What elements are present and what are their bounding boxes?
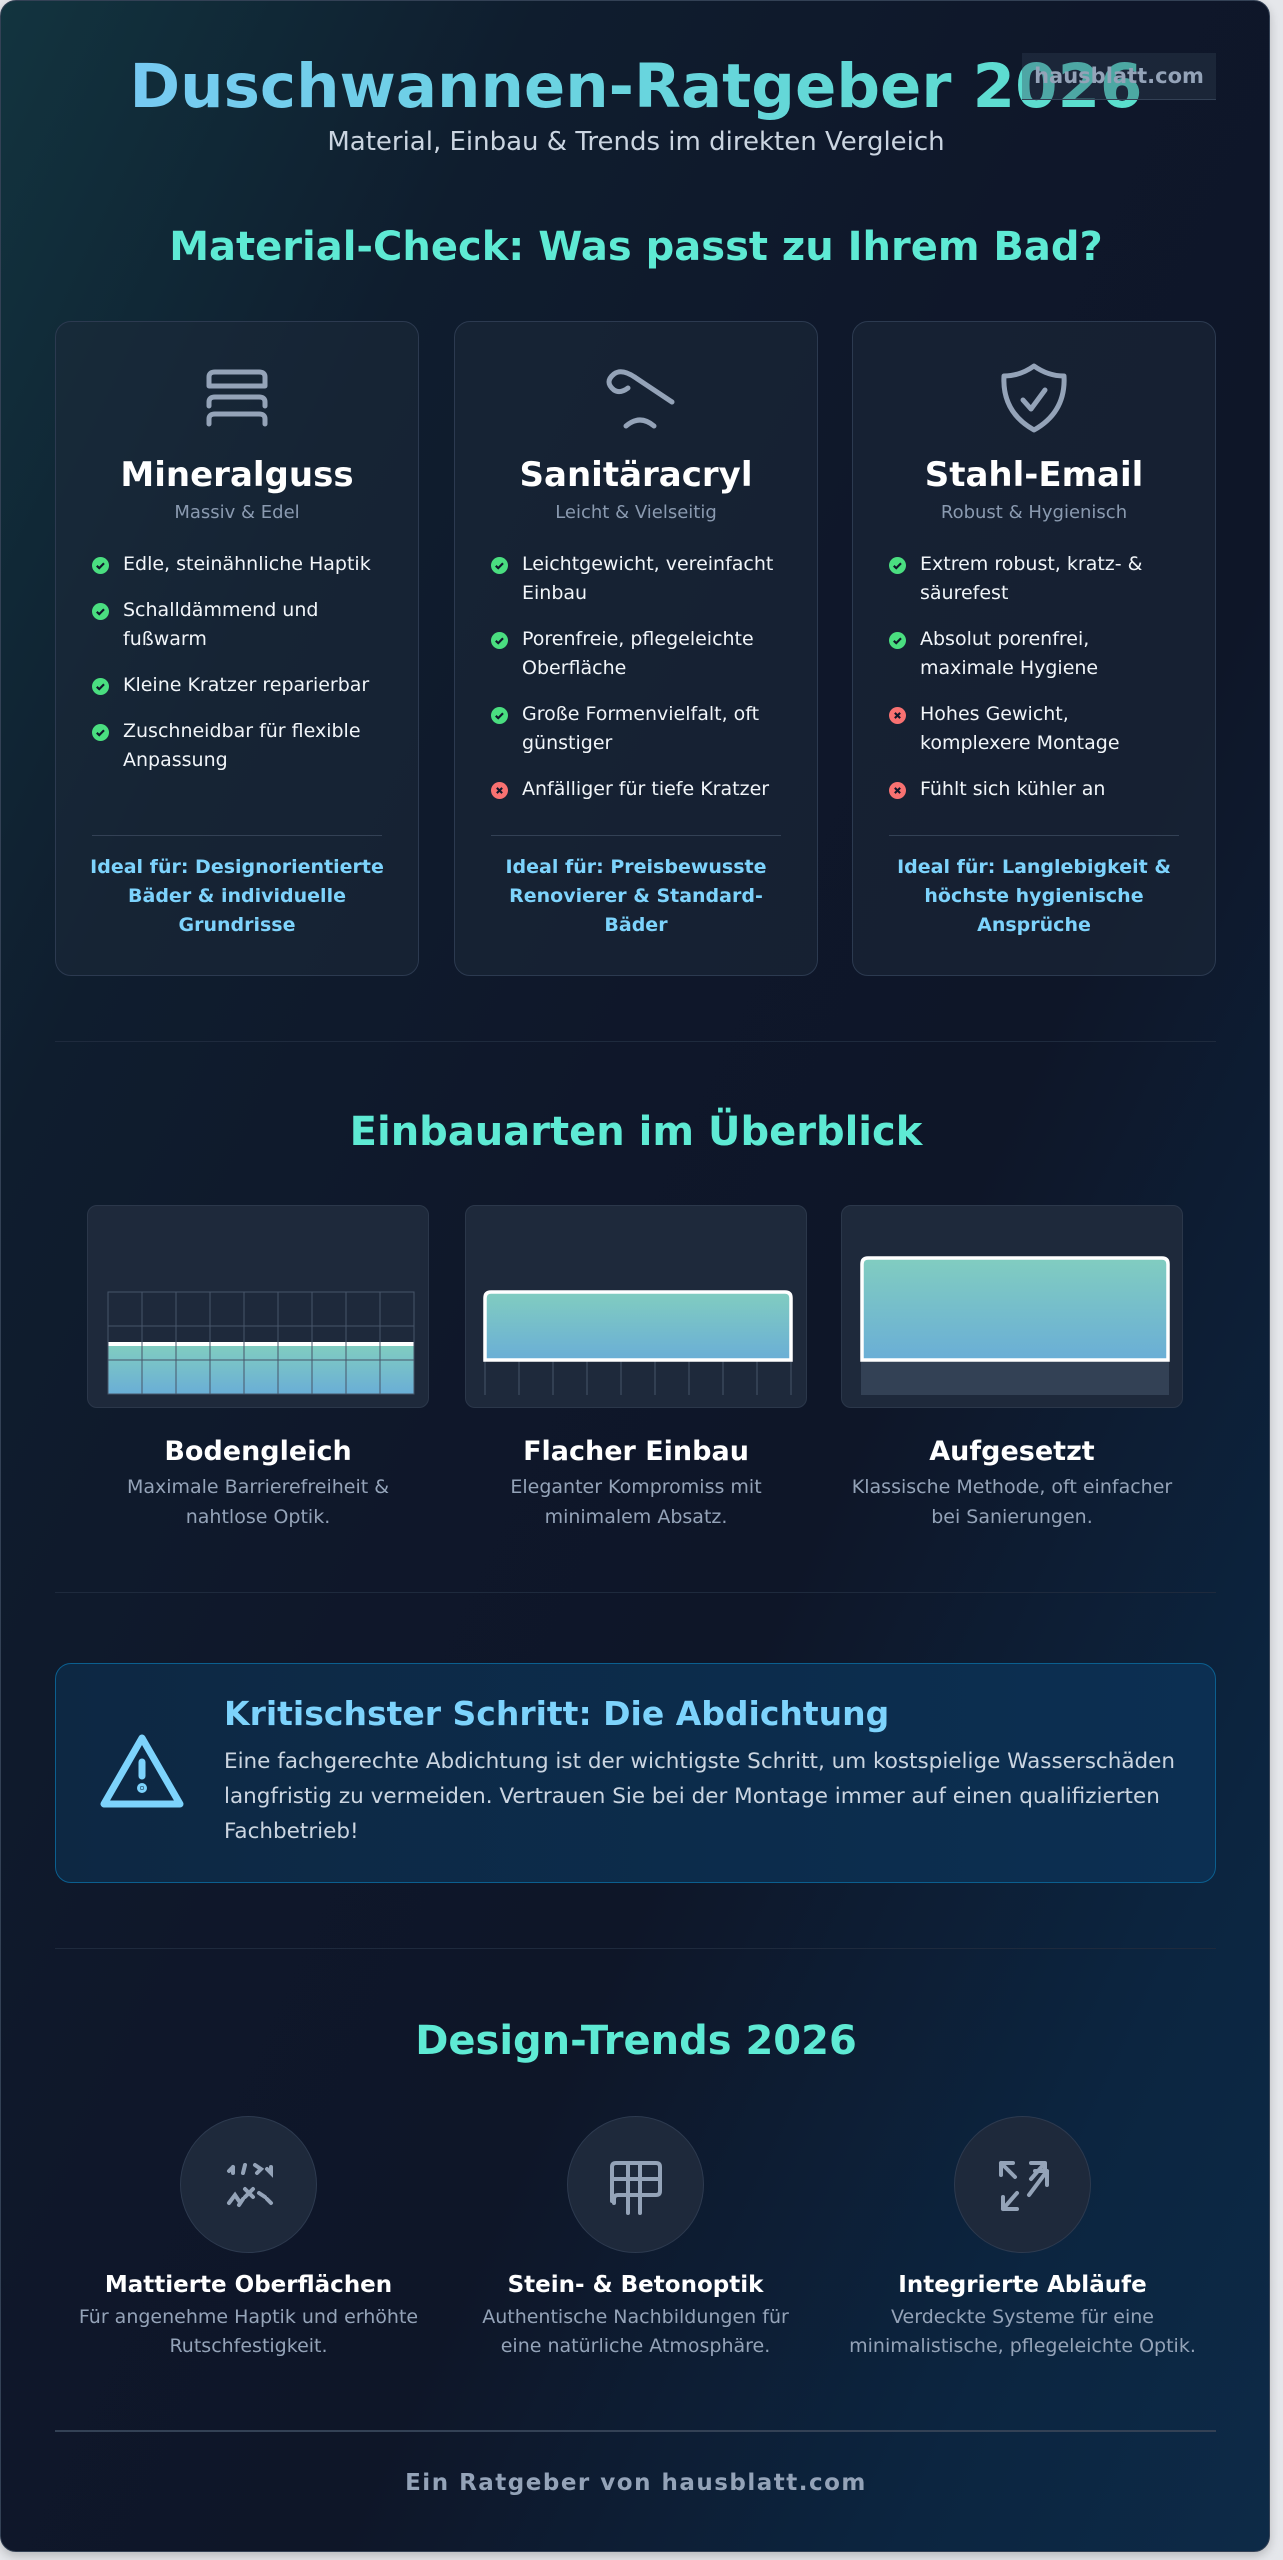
panel: Sanitäracryl: Leicht & Vielseitig bbox=[555, 502, 717, 523]
trend: stein- & betonoptik: Stein- & Betonoptik bbox=[508, 2272, 763, 2298]
trend: integrierte abläufe: Integrierte Abläufe bbox=[898, 2272, 1147, 2298]
label: aufgesetzt: bei Sanierungen. bbox=[931, 1506, 1093, 1528]
label: flacher einbau: minimalem Absatz. bbox=[545, 1506, 727, 1528]
pros/cons list: Extrem robust, kratz- & säurefest bbox=[920, 553, 1142, 604]
icon: layers bbox=[206, 370, 268, 426]
trend: mattierte oberflächen bbox=[79, 2116, 418, 2357]
trend: stein- & betonoptik bbox=[482, 2116, 789, 2357]
diagram: flacher einbau bbox=[465, 1205, 807, 1408]
label: bodengleich: Maximale Barrierefreiheit & bbox=[127, 1476, 389, 1498]
trend: mattierte oberflächen: Rutschfestigkeit. bbox=[169, 2335, 328, 2357]
footer: Ein Ratgeber von hausblatt.com bbox=[405, 2470, 867, 2496]
label: aufgesetzt: Aufgesetzt bbox=[929, 1436, 1095, 1467]
trend: integrierte abläufe: Verdeckte Systeme für eine bbox=[891, 2306, 1154, 2328]
label: aufgesetzt bbox=[852, 1436, 1172, 1528]
watermark badge: hausblatt.com bbox=[1034, 64, 1204, 88]
label: flacher einbau: Eleganter Kompromiss mit bbox=[510, 1476, 762, 1498]
ideal for: Ideal für: Preisbewusste Renovierer & Standard-Bäder bbox=[505, 856, 767, 936]
label: flacher einbau: Flacher Einbau bbox=[523, 1436, 749, 1467]
icon: arrows bbox=[954, 2116, 1091, 2253]
trend: integrierte abläufe: minimalistische, pflegeleichte Optik. bbox=[849, 2335, 1196, 2357]
card title: Stahl-Email bbox=[925, 455, 1143, 495]
pros/cons list: Anfälliger für tiefe Kratzer bbox=[522, 778, 769, 800]
card title: Sanitäracryl bbox=[520, 455, 752, 495]
panel: Stahl-Email bbox=[852, 321, 1216, 976]
icon: feather/light bbox=[606, 369, 674, 428]
label: bodengleich bbox=[127, 1436, 389, 1528]
pros/cons list: Zuschneidbar für flexible Anpassung bbox=[123, 720, 361, 771]
trend: stein- & betonoptik: Authentische Nachbildungen für bbox=[482, 2306, 789, 2328]
heading: material check: Material-Check: Was passt zu Ihrem Bad? bbox=[169, 224, 1103, 270]
label: bodengleich: Bodengleich bbox=[164, 1436, 352, 1467]
trend: mattierte oberflächen: Für angenehme Haptik und erhöhte bbox=[79, 2306, 418, 2328]
ideal for: Ideal für: Designorientierte Bäder & individuelle Grundrisse bbox=[90, 856, 384, 936]
icon: warning triangle bbox=[100, 1734, 184, 1808]
watermark badge bbox=[1022, 53, 1216, 100]
panel: Mineralguss bbox=[55, 321, 419, 976]
diagram: aufgesetzt bbox=[841, 1205, 1183, 1408]
label: bodengleich: nahtlose Optik. bbox=[186, 1506, 330, 1528]
callout text: Eine fachgerechte Abdichtung ist der wichtigste Schritt, um kostspielige Wasserschäden langfristig zu vermeiden. Vertrauen Sie bei der Montage immer auf einen qualifizierten Fachbetrieb! bbox=[224, 1749, 1175, 1844]
icon: stone bbox=[567, 2116, 704, 2253]
pros/cons list: Fühlt sich kühler an bbox=[920, 778, 1105, 800]
label: aufgesetzt: Klassische Methode, oft einfacher bbox=[852, 1476, 1172, 1498]
icon: texture bbox=[180, 2116, 317, 2253]
title: Duschwannen-Ratgeber 2026 bbox=[130, 51, 1142, 122]
pros/cons list: Edle, steinähnliche Haptik bbox=[123, 553, 371, 575]
panel: Sanitäracryl bbox=[454, 321, 818, 976]
icon: shield check bbox=[1001, 364, 1067, 432]
pros/cons list bbox=[889, 553, 1142, 800]
subtitle: Material, Einbau & Trends im direkten Vergleich bbox=[327, 127, 945, 157]
callout title: Kritischster Schritt: Die Abdichtung bbox=[224, 1694, 889, 1733]
heading: design trends: Design-Trends 2026 bbox=[415, 2018, 857, 2064]
diagram: bodengleich bbox=[87, 1205, 429, 1408]
pros/cons list: Große Formenvielfalt, oft günstiger bbox=[522, 703, 759, 754]
pros/cons list: Kleine Kratzer reparierbar bbox=[123, 674, 369, 696]
callout: abdichtung bbox=[55, 1663, 1216, 1883]
label: flacher einbau bbox=[510, 1436, 762, 1528]
trend: stein- & betonoptik: eine natürliche Atmosphäre. bbox=[501, 2335, 770, 2357]
pros/cons list: Leichtgewicht, vereinfacht Einbau bbox=[522, 553, 773, 604]
trend: mattierte oberflächen: Mattierte Oberflächen bbox=[105, 2272, 392, 2298]
panel: Mineralguss: Massiv & Edel bbox=[174, 502, 300, 523]
pros/cons list: Porenfreie, pflegeleichte Oberfläche bbox=[522, 628, 754, 679]
ideal for: Ideal für: Langlebigkeit & höchste hygienische Ansprüche bbox=[897, 856, 1171, 936]
heading: einbauarten: Einbauarten im Überblick bbox=[350, 1109, 922, 1155]
pros/cons list bbox=[491, 553, 773, 800]
card title: Mineralguss bbox=[120, 455, 354, 495]
pros/cons list bbox=[92, 553, 371, 771]
pros/cons list: Schalldämmend und fußwarm bbox=[123, 599, 318, 650]
trend: integrierte abläufe bbox=[849, 2116, 1196, 2357]
panel: Stahl-Email: Robust & Hygienisch bbox=[941, 502, 1127, 523]
pros/cons list: Absolut porenfrei, maximale Hygiene bbox=[920, 628, 1098, 679]
pros/cons list: Hohes Gewicht, komplexere Montage bbox=[920, 703, 1120, 754]
